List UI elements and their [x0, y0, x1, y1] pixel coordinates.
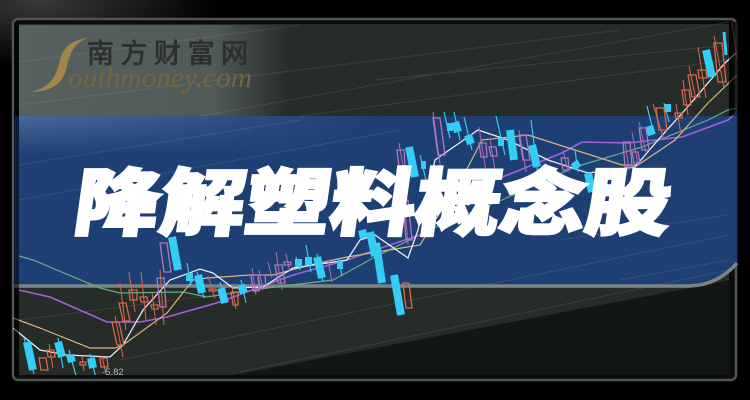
band lower edge	[14, 263, 737, 286]
wicks: cyan	[24, 103, 669, 378]
price label: -5.82	[102, 367, 124, 378]
blue title band	[14, 116, 737, 285]
candle bodies: pink outlined	[157, 118, 649, 307]
logo	[32, 38, 252, 94]
right frame shade	[729, 22, 737, 116]
moving average: white	[13, 52, 737, 357]
dark lower-right wedge	[233, 280, 729, 375]
moving average: purple	[19, 112, 737, 322]
title: 降解塑料概念股	[70, 163, 677, 245]
candle bodies: red outlined	[39, 43, 726, 370]
moving average: peach	[13, 75, 737, 348]
logo Chinese name: 南方财富网	[87, 39, 248, 69]
logo domain: outhmoney.com	[68, 63, 252, 94]
left frame shade	[14, 22, 19, 376]
candle bodies: cyan	[27, 50, 712, 370]
logo swoosh S	[32, 38, 88, 92]
moving average: green	[19, 108, 737, 297]
wicks: pink	[252, 112, 646, 295]
logo highlight panel	[19, 25, 289, 116]
